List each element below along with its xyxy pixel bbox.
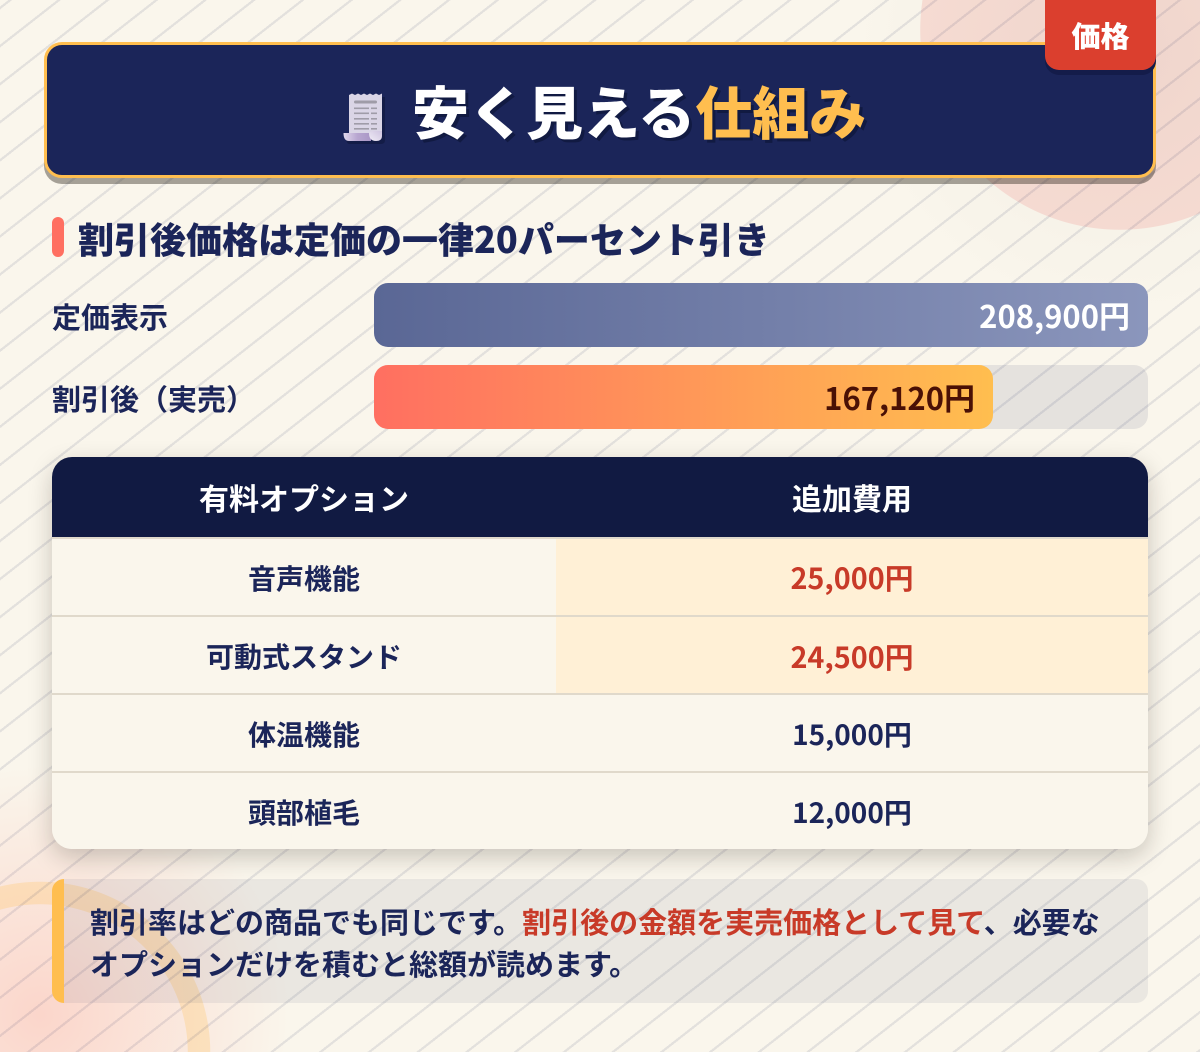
row: 音声機能 [248, 556, 914, 598]
header banner [44, 42, 1156, 178]
callout note: 割引率はどの商品でも同じです。割引後の金額を実売価格として見て、必要な [90, 900, 1100, 942]
row: 頭部植毛: 頭部植毛 [248, 792, 360, 832]
row: 音声機能: 音声機能 [248, 558, 360, 598]
row: 頭部植毛: 12,000円 [792, 792, 912, 832]
bar: list price [374, 283, 1148, 347]
icon: receipt [344, 94, 385, 144]
tag: 価格 [1045, 0, 1156, 70]
callout note: オプションだけを積むと総額が読めます。 [90, 942, 638, 984]
row: 可動式スタンド [206, 636, 914, 676]
heading text: 割引後価格は定価の一律20パーセント引き [78, 212, 770, 264]
section heading [52, 212, 770, 264]
row: 可動式スタンド: 可動式スタンド [206, 636, 402, 676]
row highlight [556, 539, 1148, 694]
row: 体温機能: 体温機能 [248, 714, 360, 754]
bar chart: list vs discounted price [52, 283, 1148, 429]
row: 音声機能: 25,000円 [790, 556, 914, 598]
tag: 価格: 価格 [1071, 14, 1130, 56]
heading accent [52, 217, 64, 257]
title: 安く見える仕組み [412, 69, 866, 151]
row: 体温機能 [248, 714, 912, 754]
table header: 追加費用 [792, 475, 912, 519]
row: 可動式スタンド: 24,500円 [790, 636, 914, 676]
bar: list price: 208,900円 [979, 292, 1130, 337]
label: 割引後（実売）: 割引後（実売） [52, 377, 255, 419]
bar track [374, 365, 1148, 429]
row: 体温機能: 15,000円 [792, 714, 912, 754]
callout note [52, 879, 1148, 1003]
bar: discounted price: 167,120円 [824, 374, 975, 419]
row: 頭部植毛 [248, 792, 912, 832]
label: 定価表示: 定価表示 [52, 295, 168, 337]
table: paid options [52, 457, 1148, 849]
table header [52, 457, 1148, 537]
bar: discounted price [374, 365, 993, 429]
table header: 有料オプション [199, 475, 409, 519]
